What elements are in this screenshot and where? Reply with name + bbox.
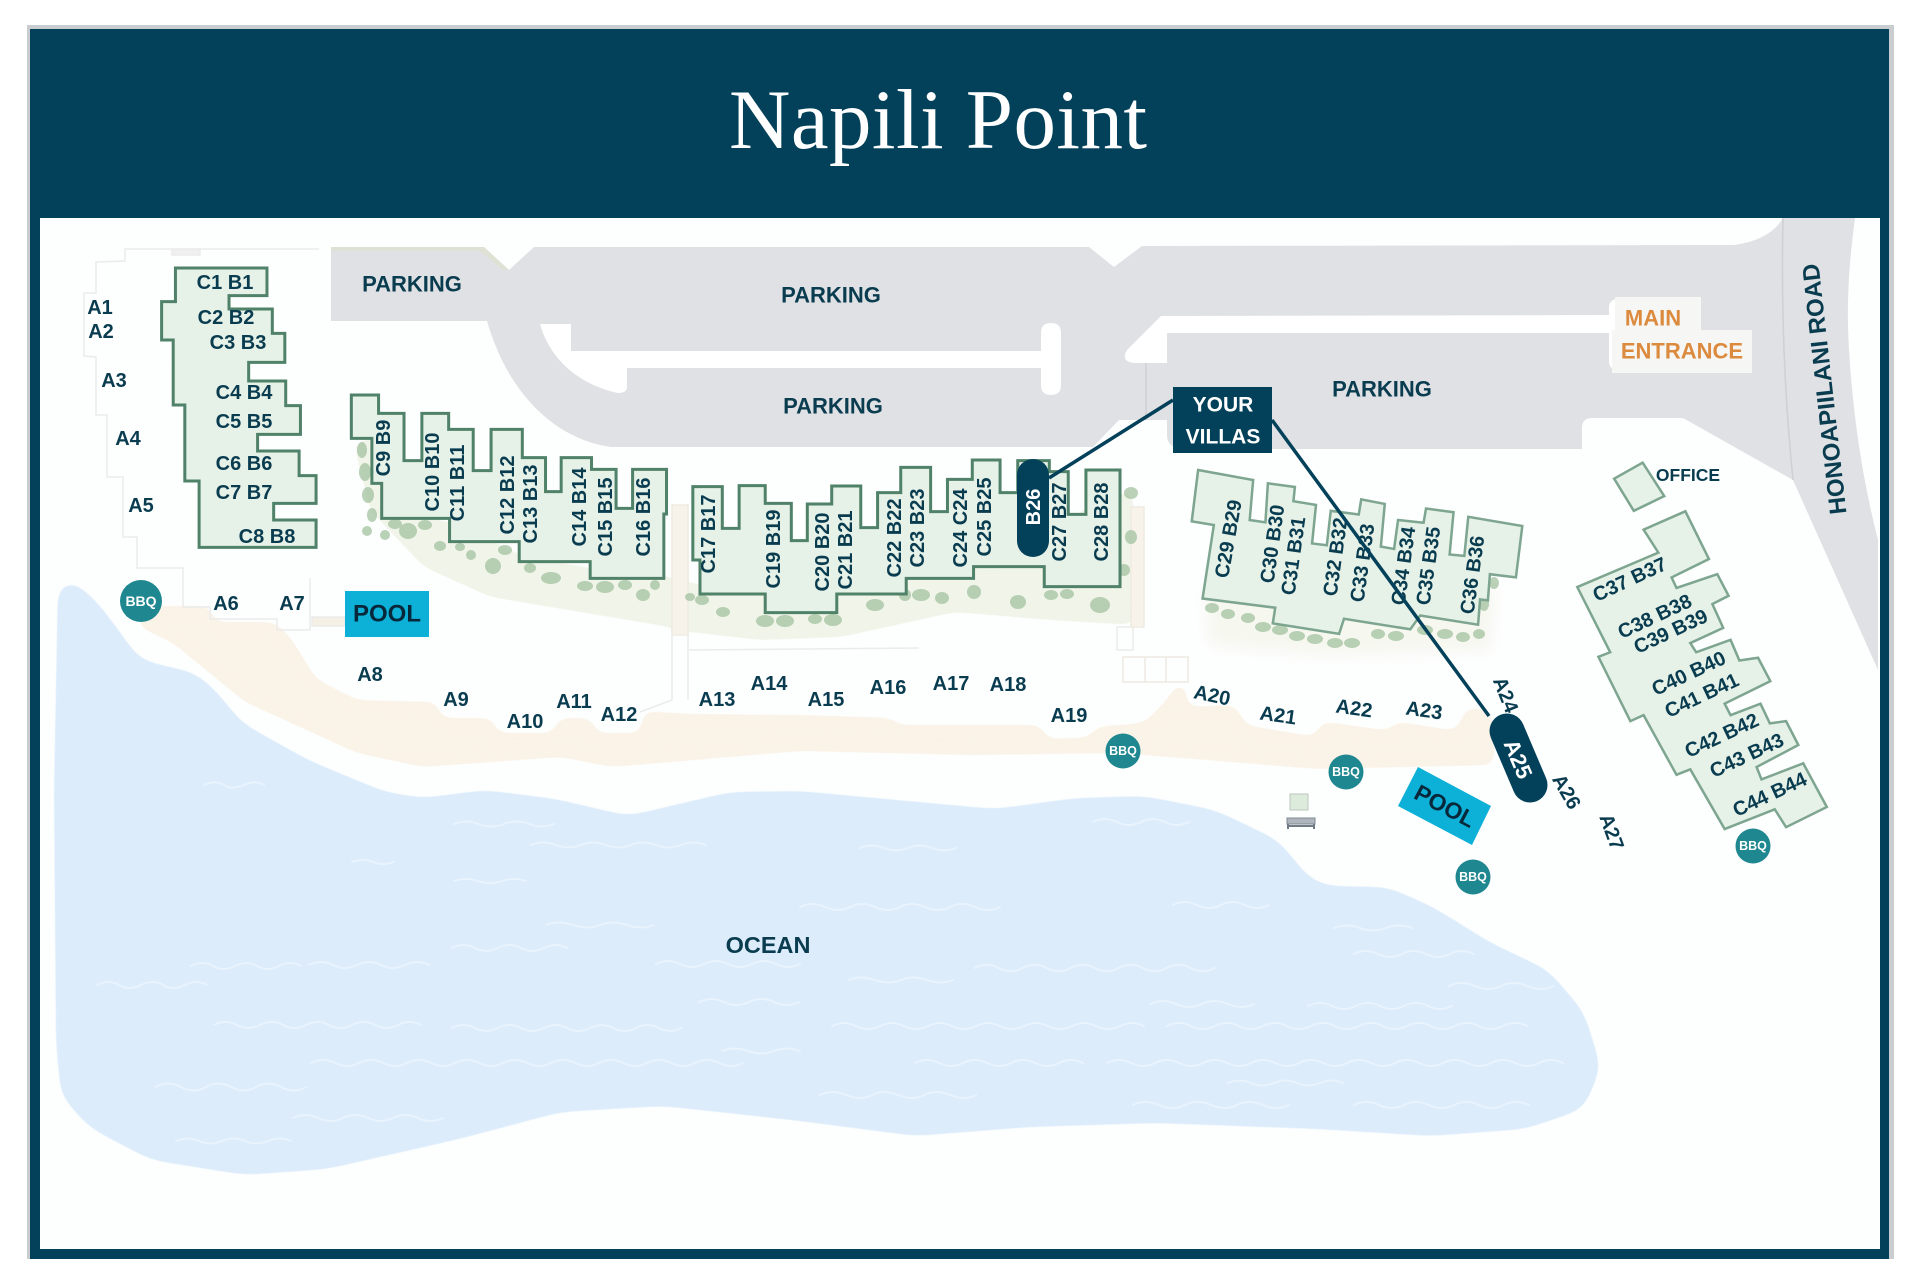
pool west: POOL (353, 600, 421, 628)
building: C9-C16: C15 B15 (595, 478, 617, 556)
parking labels: PARKING (783, 394, 883, 418)
villa labels A1-A27: A15 (808, 689, 844, 711)
highlight: A25: A25 (1499, 736, 1537, 782)
icon: BBQ centre: BBQ (1109, 744, 1137, 758)
villa labels A1-A27: A19 (1051, 705, 1087, 727)
villa labels A1-A27: A1 (87, 297, 113, 319)
building: C37-C44 (1577, 511, 1827, 829)
villa labels A1-A27: A3 (101, 370, 127, 392)
pool east (1398, 767, 1491, 845)
villa labels A1-A27: A6 (213, 593, 239, 615)
office building (1614, 463, 1720, 511)
building: C9-C16: C12 B12 (497, 456, 519, 534)
building: C1-C8: C3 B3 (210, 332, 266, 354)
walkways and site outlines (84, 249, 1188, 712)
leader lines from your villas (1049, 400, 1489, 716)
building: C1-C8: C1 B1 (197, 272, 253, 294)
main entrance label (1621, 306, 1743, 364)
building: C9-C16: C10 B10 (422, 433, 444, 511)
villa labels A1-A27: A7 (279, 593, 305, 615)
building: C9-C16: C16 B16 (633, 478, 655, 556)
icon: BBQ beach: BBQ (1332, 765, 1360, 779)
building: C9-C16: C14 B14 (569, 467, 591, 546)
icon: BBQ west: BBQ (125, 593, 157, 609)
villa labels A1-A27: A22 (1334, 696, 1374, 722)
ocean (54, 580, 1601, 1175)
building: C37-C44: C39 B39 (1631, 605, 1711, 659)
parking labels: PARKING (781, 282, 881, 308)
parking labels: PARKING (1332, 376, 1432, 402)
office building: OFFICE (1656, 465, 1720, 485)
landscaped ground under east buildings (1205, 590, 1495, 655)
icon: BBQ beach (1328, 754, 1364, 790)
villa labels A1-A27: A14 (751, 673, 788, 695)
villa labels A1-A27: A17 (933, 673, 969, 695)
villa labels A1-A27: A12 (601, 704, 637, 726)
villa labels A1-A27: A21 (1258, 703, 1298, 729)
building: C1-C8: C6 B6 (216, 453, 272, 475)
parking labels (362, 272, 1432, 418)
villa labels A1-A27: A26 (1547, 771, 1585, 813)
building: C17-C28: C20 B20 (812, 513, 834, 591)
ocean waves (97, 782, 1563, 1144)
building: C1-C8: C7 B7 (216, 482, 272, 504)
building: C29-C36: C34 B34 (1388, 525, 1421, 607)
building: C17-C28: C24 C24 (950, 488, 972, 567)
building: C9-C16: C13 B13 (520, 465, 542, 543)
villa labels A1-A27: A18 (990, 674, 1026, 696)
building: C1-C8: C8 B8 (239, 526, 295, 548)
villa labels A1-A27 (87, 297, 1628, 853)
building: C9-C16 (351, 395, 667, 578)
callout: your villas (1173, 387, 1272, 453)
building: C29-C36 (1192, 470, 1522, 634)
villa labels A1-A27: A27 (1594, 811, 1628, 853)
main entrance label: MAIN (1625, 306, 1681, 330)
icon: BBQ east: BBQ (1739, 839, 1767, 853)
title: Napili Point (729, 73, 1147, 167)
building: C1-C8: C4 B4 (216, 382, 273, 404)
villa labels A1-A27: A5 (128, 495, 154, 517)
building: C17-C28: C27 B27 (1049, 483, 1071, 561)
building: C37-C44: C37 B37 (1590, 553, 1670, 607)
pool west (345, 591, 429, 637)
villa labels A1-A27: A20 (1192, 681, 1232, 711)
highlight: B26 (1017, 459, 1049, 557)
icon: BBQ east (1736, 828, 1770, 864)
building: C17-C28: C25 B25 (974, 478, 996, 556)
villa labels A1-A27: A4 (115, 428, 142, 450)
beach sand (135, 606, 1495, 769)
building: C17-C28: C19 B19 (763, 510, 785, 588)
building: C29-C36: C32 B32 (1320, 516, 1352, 598)
villa labels A1-A27: A2 (88, 321, 114, 343)
highlight: B26: B26 (1023, 489, 1045, 525)
building: C29-C36: C30 B30 (1257, 503, 1289, 585)
building: C37-C44: C38 B38 (1615, 590, 1695, 644)
building: C37-C44: C40 B40 (1649, 647, 1729, 701)
icon: BBQ centre (1106, 734, 1140, 768)
header banner (30, 29, 1889, 218)
building: C29-C36: C36 B36 (1457, 534, 1489, 616)
building: C37-C44: C43 B43 (1707, 729, 1787, 783)
pool east: POOL (1410, 779, 1480, 833)
building: C29-C36: C31 B31 (1278, 515, 1310, 597)
landscaped ground under west buildings (353, 440, 1135, 640)
building: C29-C36: C29 B29 (1211, 498, 1247, 580)
villa labels A1-A27: A24 (1488, 674, 1522, 717)
callout: your villas: YOUR (1193, 394, 1253, 416)
building: C17-C28: C21 B21 (835, 511, 857, 589)
icon: bench and table (1287, 794, 1315, 829)
main entrance label: ENTRANCE (1621, 338, 1743, 364)
villa labels A1-A27: A13 (699, 689, 735, 711)
callout: your villas: VILLAS (1186, 426, 1260, 448)
building: C17-C28: C17 B17 (698, 495, 720, 573)
building: C1-C8: C2 B2 (198, 307, 254, 329)
villa labels A1-A27: A11 (556, 691, 592, 713)
icon: BBQ south (1456, 860, 1490, 894)
villa labels A1-A27: A9 (443, 689, 469, 711)
icon: BBQ west (120, 580, 162, 622)
building: C9-C16: C9 B9 (373, 420, 395, 476)
building: C1-C8 (162, 268, 316, 548)
parking labels: PARKING (362, 272, 462, 296)
building: C17-C28: C23 B23 (907, 489, 929, 567)
building: C1-C8: C5 B5 (216, 411, 272, 433)
building: C17-C28: C28 B28 (1091, 483, 1113, 561)
building: C29-C36: C33 B33 (1347, 522, 1379, 604)
villa labels A1-A27: A10 (507, 711, 543, 733)
building: C29-C36: C35 B35 (1413, 525, 1445, 607)
shrubs and trees (357, 442, 1499, 648)
parking lots and road (331, 218, 1878, 670)
villa labels A1-A27: A23 (1404, 698, 1444, 724)
building: C9-C16: C11 B11 (447, 445, 469, 521)
building: C17-C28 (693, 460, 1120, 613)
building: C17-C28: C22 B22 (884, 499, 906, 577)
ocean label: OCEAN (726, 932, 810, 958)
building: C37-C44: C42 B42 (1682, 709, 1762, 763)
building: C37-C44: C44 B44 (1730, 768, 1811, 822)
building: C37-C44: C41 B41 (1662, 669, 1742, 723)
villa labels A1-A27: A16 (870, 677, 906, 699)
icon: BBQ south: BBQ (1459, 870, 1487, 884)
villa labels A1-A27: A8 (357, 664, 383, 686)
road label: HONOAPIILANI ROAD (1798, 262, 1852, 516)
